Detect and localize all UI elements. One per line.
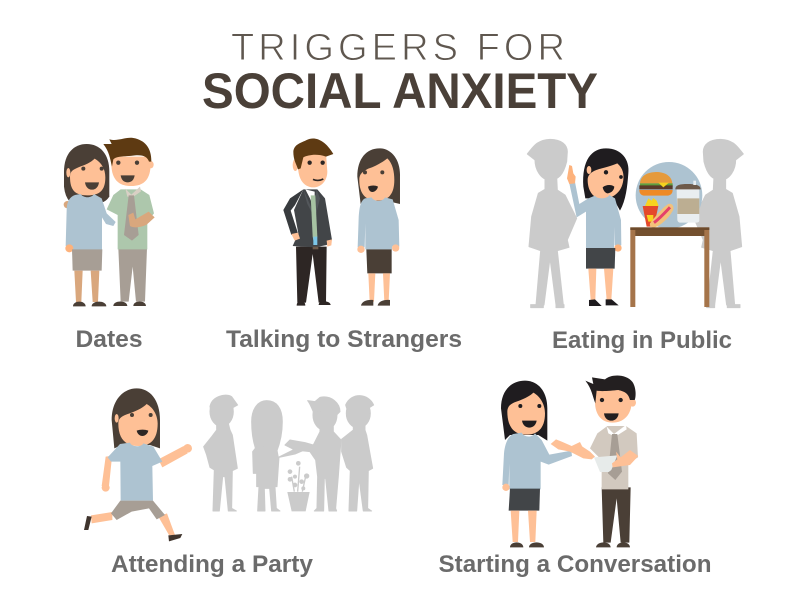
illustration: starting a conversation: [501, 375, 638, 547]
title: SOCIAL ANXIETY: [202, 63, 598, 119]
label: Starting a Conversation: Starting a Conversation: [438, 551, 712, 578]
illustration: eating in public: [527, 139, 743, 308]
man in suit: [283, 139, 333, 306]
label: Eating in Public: Eating in Public: [552, 327, 732, 354]
silhouettes: [204, 395, 374, 511]
woman: [357, 148, 400, 306]
title: TRIGGERS FOR: [231, 27, 565, 69]
illustration: attending a party: [84, 388, 374, 541]
woman: [501, 381, 584, 547]
food bubble: [636, 162, 702, 229]
running woman: [84, 388, 192, 541]
illustration: talking to strangers: [283, 139, 400, 306]
label: Dates: Dates: [76, 326, 142, 353]
label: Talking to Strangers: Talking to Strangers: [226, 326, 462, 353]
silhouette left: [527, 139, 577, 308]
woman: [567, 148, 629, 306]
silhouette right: [694, 139, 743, 308]
plant pot: [287, 461, 310, 511]
woman: [64, 144, 116, 306]
label: Attending a Party: Attending a Party: [111, 551, 314, 578]
man: [570, 375, 638, 547]
table: [630, 227, 709, 307]
man: [103, 138, 155, 306]
illustration: dates couple: [64, 138, 155, 306]
title: [202, 27, 598, 119]
